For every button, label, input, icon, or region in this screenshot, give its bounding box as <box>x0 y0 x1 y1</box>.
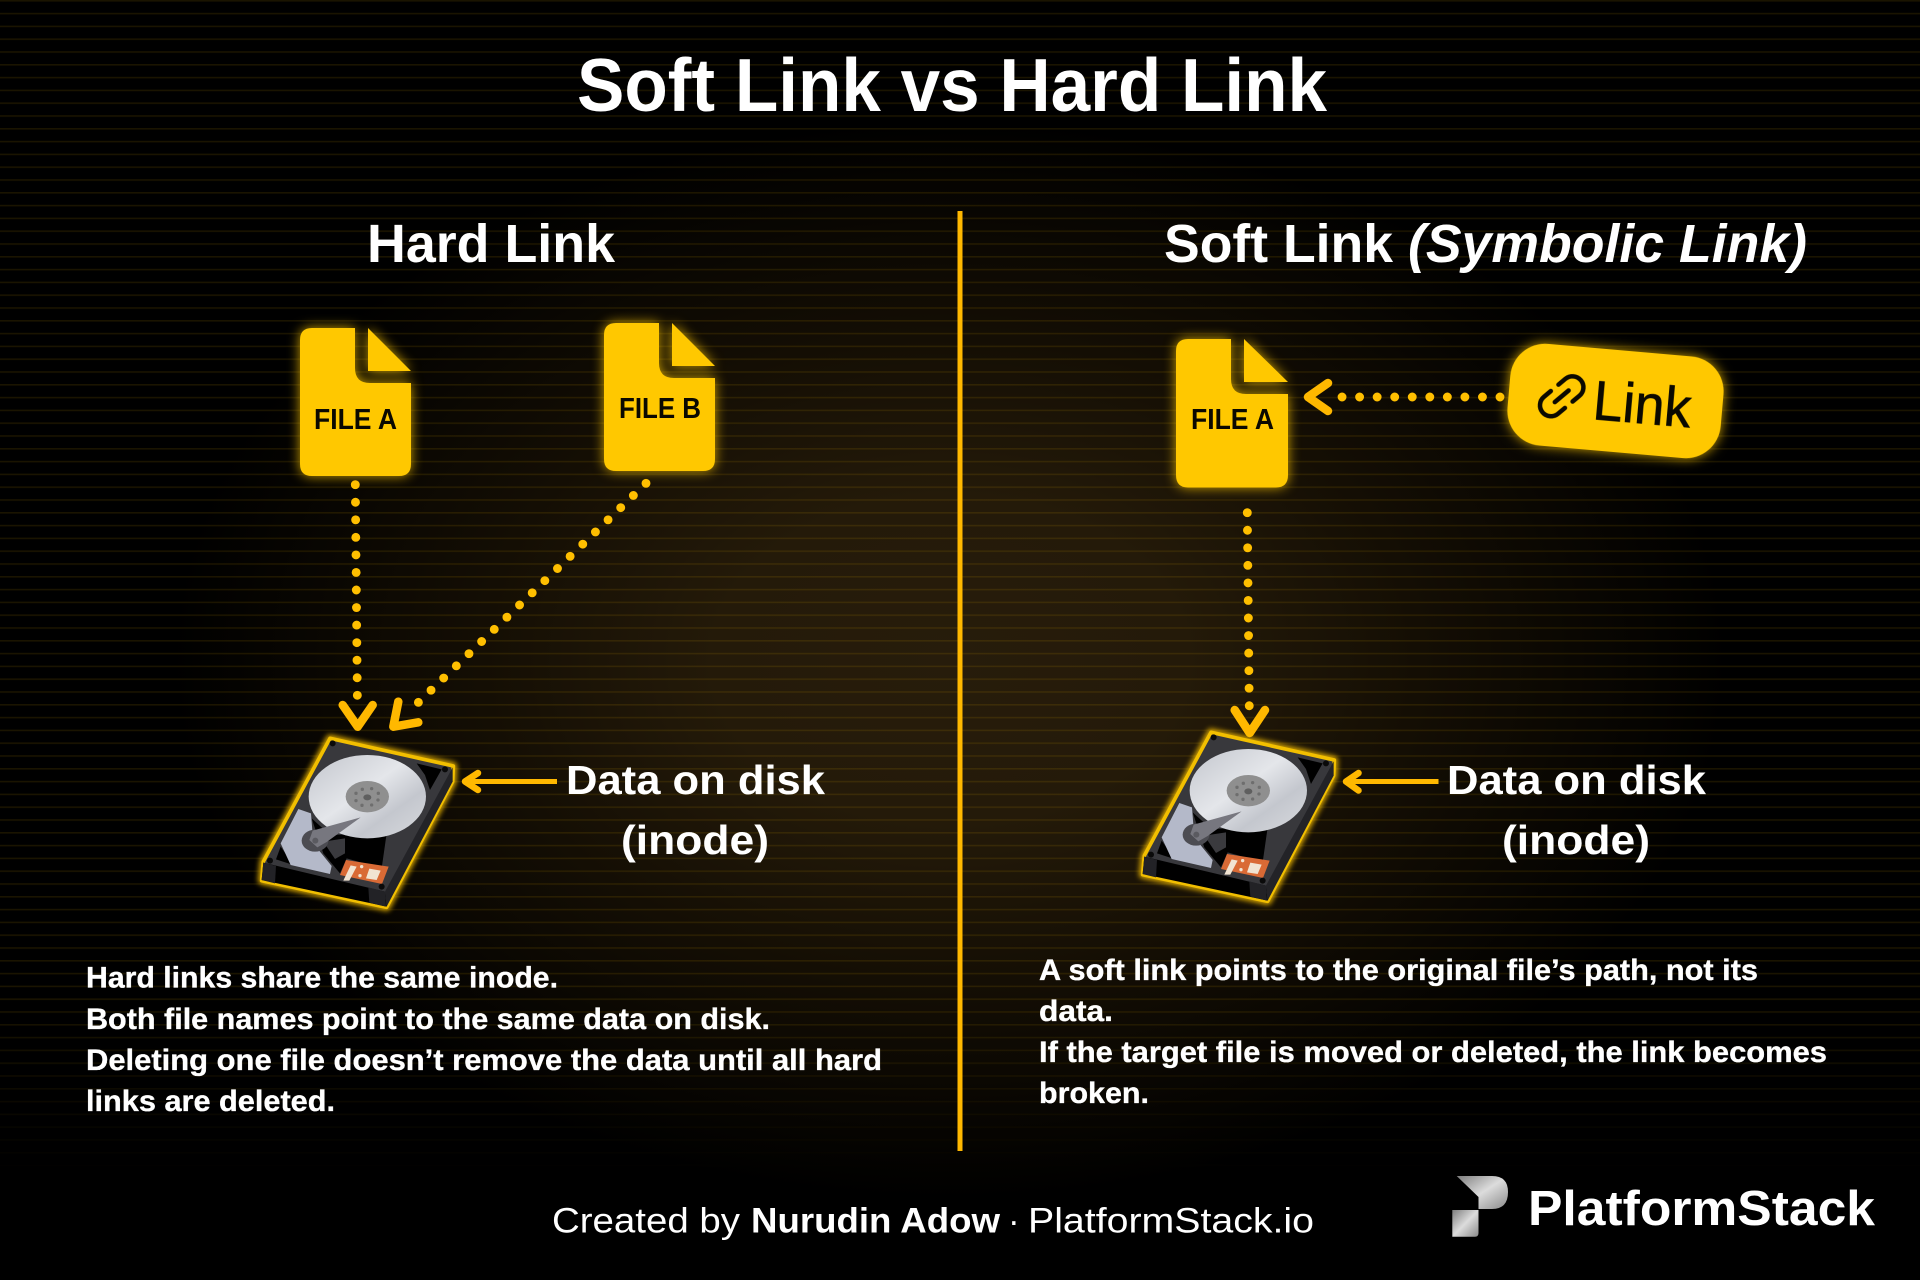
footer credit: Created by <box>552 1202 741 1240</box>
footer credit: PlatformStack.io <box>1028 1202 1314 1240</box>
icon: file B <box>604 323 715 471</box>
arrow: to disk <box>465 773 557 790</box>
footer credit <box>552 1202 1314 1240</box>
footer credit: Nurudin Adow <box>751 1202 1001 1240</box>
icon: file A: FILE A <box>314 404 397 436</box>
icon: file A: FILE A <box>1191 404 1274 436</box>
text: soft link description <box>1039 954 1827 1110</box>
footer credit: · <box>1008 1202 1020 1240</box>
label: data on disk <box>1447 757 1706 863</box>
arrow: file A to disk <box>343 485 373 727</box>
heading: hard link: Hard Link <box>367 214 616 274</box>
label: data on disk: (inode) <box>621 817 769 863</box>
icon: logo mark <box>1452 1176 1508 1237</box>
text: hard link description <box>86 962 882 1118</box>
heading: soft link: Soft Link <box>1164 214 1394 274</box>
icon: chain <box>1535 372 1588 421</box>
logo: PlatformStack <box>1452 1176 1876 1237</box>
panel: soft link <box>1039 214 1827 1110</box>
text: hard link description: Both file names point to the same data on disk. <box>86 1003 770 1036</box>
title: Soft Link vs Hard Link <box>577 43 1327 127</box>
text: soft link description: If the target file is moved or deleted, the link becomes <box>1039 1036 1827 1069</box>
text: hard link description: Deleting one file doesn’t remove the data until all hard <box>86 1044 882 1077</box>
arrow: file A to disk <box>1235 513 1265 733</box>
label: link: Link <box>1591 368 1695 440</box>
icon: hard disk <box>262 738 453 907</box>
label: data on disk: Data on disk <box>1447 757 1706 803</box>
icon: hard disk <box>1143 732 1334 901</box>
text: soft link description: A soft link points to the original file’s path, not its <box>1039 954 1758 987</box>
label: data on disk: (inode) <box>1502 817 1650 863</box>
text: hard link description: Hard links share the same inode. <box>86 962 558 994</box>
text: soft link description: broken. <box>1039 1077 1149 1110</box>
arrow: link to file A <box>1308 383 1500 411</box>
heading: soft link: (Symbolic Link) <box>1408 214 1807 274</box>
text: hard link description: links are deleted. <box>86 1085 335 1118</box>
wordmark: PlatformStack <box>1528 1182 1876 1236</box>
label: data on disk <box>566 757 825 863</box>
label: data on disk: Data on disk <box>566 757 825 803</box>
arrow: file B to disk <box>393 483 646 727</box>
icon: file B: FILE B <box>619 393 701 425</box>
arrow: to disk <box>1346 773 1438 790</box>
icon: file A <box>1176 339 1288 488</box>
divider <box>958 211 962 1151</box>
icon: file A <box>300 328 411 476</box>
icon: link pill <box>1504 341 1727 461</box>
text: soft link description: data. <box>1039 995 1113 1028</box>
panel: hard link <box>86 214 882 1118</box>
